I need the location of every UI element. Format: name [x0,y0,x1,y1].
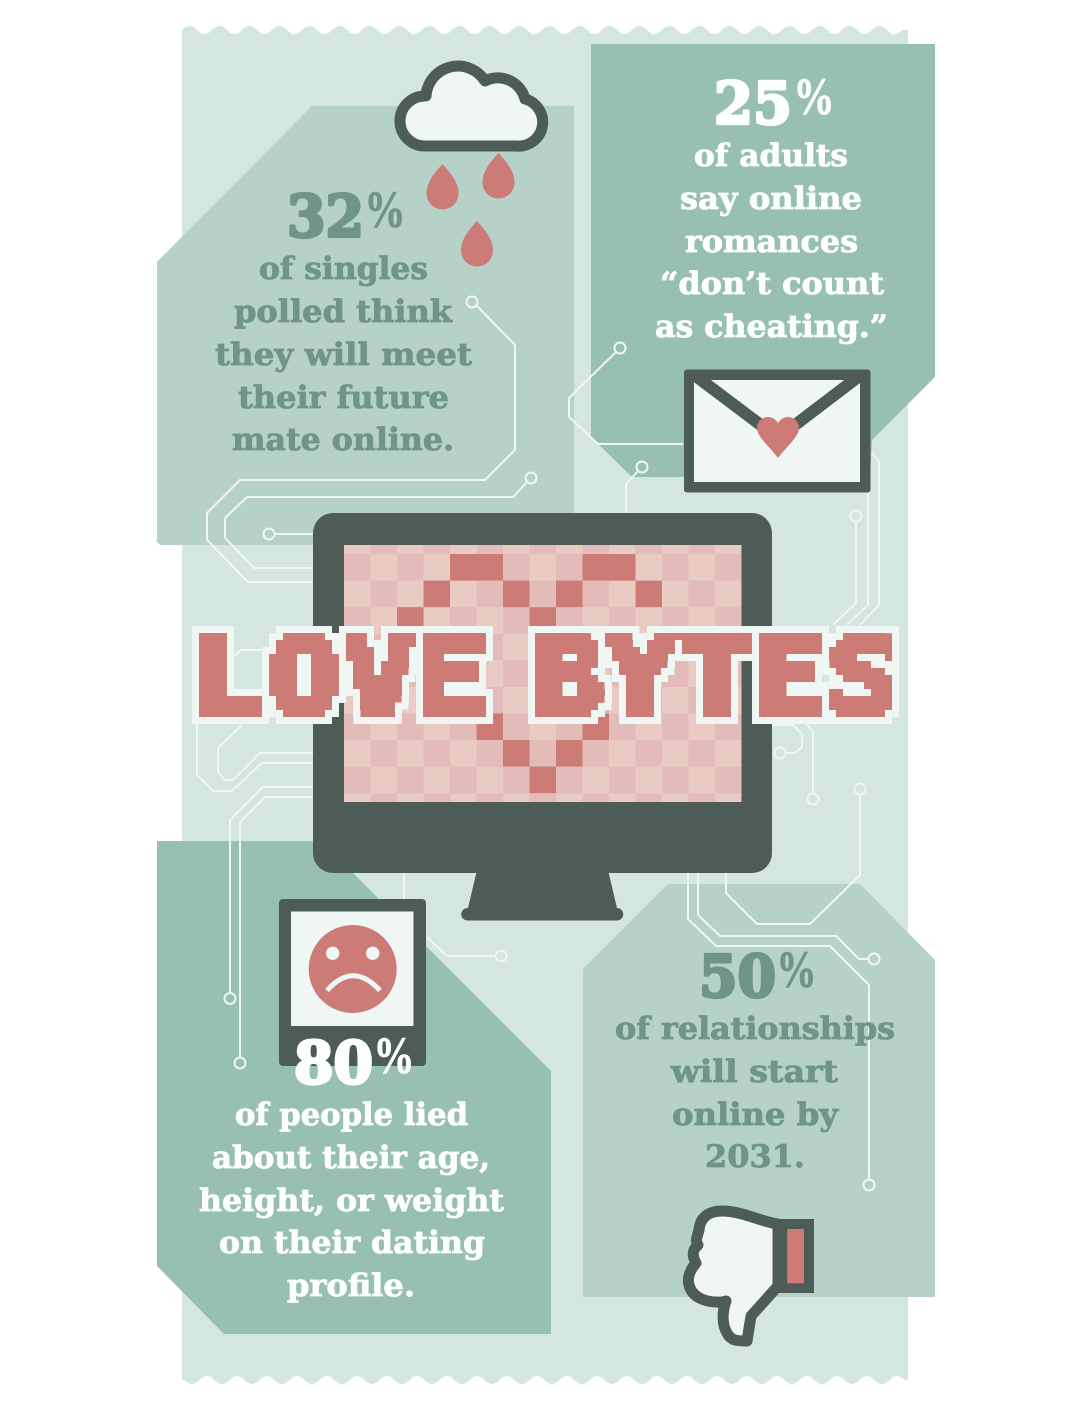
icon: sad face photo [279,899,426,1066]
text block: 25% of adults [655,69,888,345]
statistic 25% [714,69,834,138]
statistic 25%: % [794,69,834,126]
circuit lines [197,296,880,1190]
statistic 32%: 32 [287,182,364,250]
title: LOVE BYTES [193,616,898,739]
text block: 50% of relationships: 2031. [705,1139,805,1175]
cloud [400,66,543,146]
text block: 25% of adults: as cheating.” [655,309,888,345]
statistic 50% [699,942,816,1010]
icon: thumbs down [688,1211,814,1341]
rain drops [426,153,514,266]
scalloped background strip [182,26,908,1384]
text block: 50% of relationships [615,942,895,1175]
pixel heart screen [344,545,742,802]
monitor stand [461,870,623,920]
text block: 32% of singles: mate online. [232,422,454,458]
icon: envelope with heart [684,370,870,492]
text block: 32% of singles: of singles [259,251,428,287]
statistic 80%: 80 [294,1029,373,1097]
icon: rain cloud [400,66,543,267]
statistic 80% [294,1028,414,1097]
text block: 80% of people: of people lied [235,1097,468,1133]
text block: 25% of adults: “don’t count [660,266,885,302]
text block: 50% of relationships: will start [670,1054,839,1090]
computer monitor [313,513,772,920]
panel: relationships background [583,884,935,1297]
panel: singles background [157,106,574,545]
text block: 80% of people: about their age, [212,1140,490,1176]
text block: 50% of relationships: of relationships [615,1011,895,1047]
statistic 50%: % [776,942,816,999]
panel: adults background [591,44,935,477]
text block: 32% of singles: their future [238,380,449,416]
text block: 32% of singles: polled think [234,294,454,330]
text block: 32% of singles [215,182,473,458]
text block: 80% of people [199,1028,505,1304]
text block: 25% of adults: of adults [694,138,848,174]
text block: 80% of people: height, or weight [199,1183,505,1219]
statistic 25%: 25 [714,70,792,138]
monitor body [313,513,772,873]
text block: 80% of people: on their dating [219,1225,485,1261]
statistic 80%: % [374,1028,414,1085]
text block: 80% of people: profile. [287,1268,415,1304]
text block: 25% of adults: say online [680,181,862,217]
text block: 32% of singles: they will meet [215,337,473,373]
statistic 50%: 50 [699,942,776,1010]
statistic 32% [287,182,406,250]
text block: 50% of relationships: online by [672,1097,839,1133]
text block: 25% of adults: romances [685,224,858,260]
panel: people lied background [157,841,551,1334]
statistic 32%: % [364,182,406,239]
